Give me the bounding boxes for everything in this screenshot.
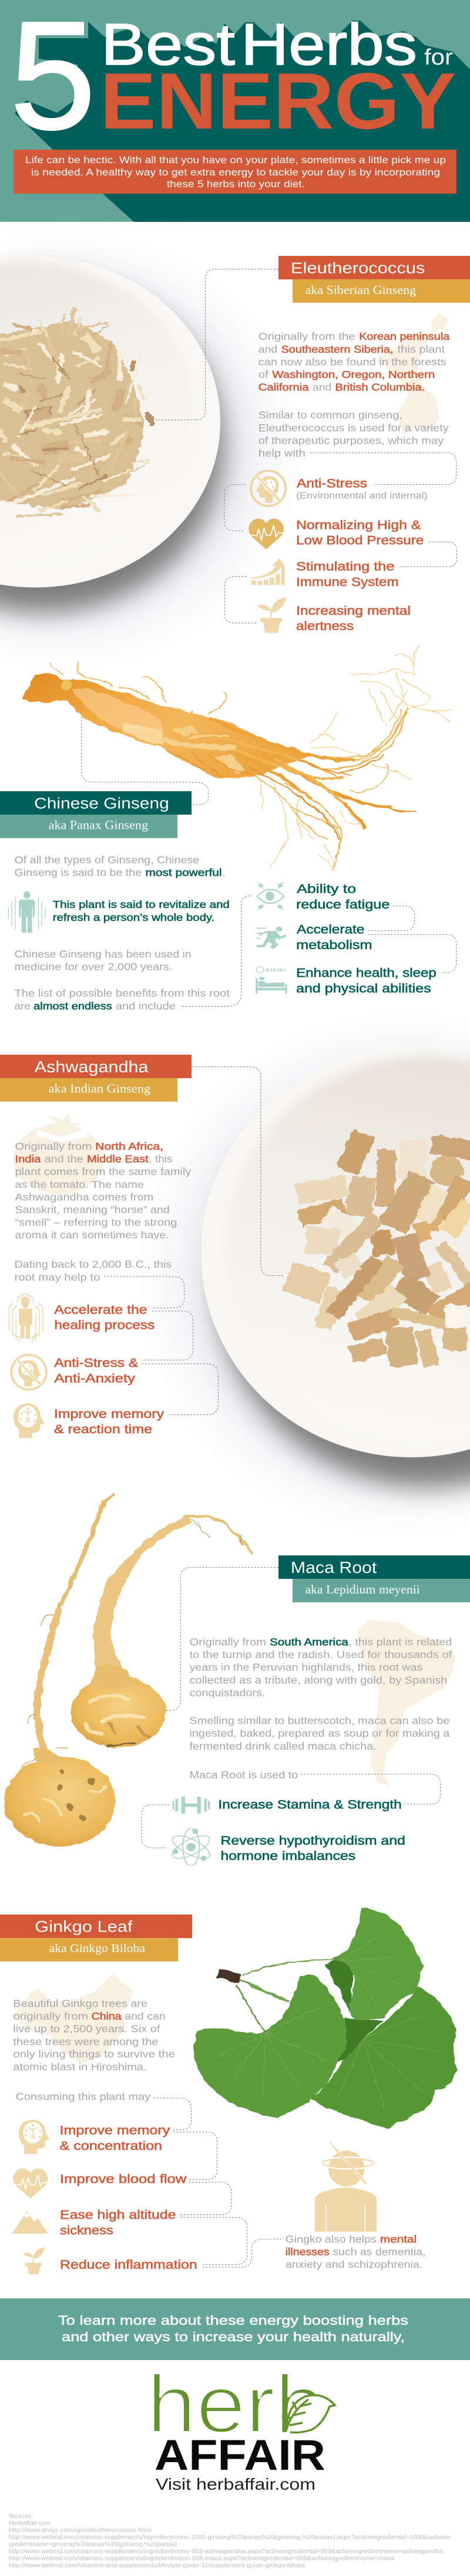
intro box: is needed. A healthy way to get extra energy to tackle your day is by incorporating [31, 167, 440, 178]
origin text: North Africa, [95, 1140, 163, 1152]
callout line to roots [192, 1067, 283, 1276]
benefit: immune system: Stimulating the [296, 559, 394, 573]
benefit: health and sleep: Enhance health, sleep [296, 965, 437, 980]
origin text: Southeastern Siberia, [281, 344, 393, 355]
usage text: root may help to [14, 1271, 100, 1283]
root chunks [288, 1134, 470, 1365]
usage text [258, 410, 449, 460]
origin text: aroma it can sometimes have. [15, 1229, 169, 1241]
name banner: aka Lepidium meyenii [305, 1583, 420, 1596]
origin text [15, 1140, 192, 1241]
origin text: these trees were among the [13, 2035, 158, 2047]
benefit: stamina: Increase Stamina & Strength [218, 1797, 402, 1811]
origin text: China [92, 2010, 122, 2022]
history text [14, 949, 192, 973]
ginseng root photo [22, 646, 452, 871]
connector lines [154, 2098, 283, 2267]
panel: Chinese Ginseng [0, 646, 456, 1012]
benefit: altitude: Ease high altitude [60, 2208, 176, 2221]
benefit: hormones [221, 1834, 405, 1863]
intro text [14, 855, 226, 879]
icon: anti-stress [251, 471, 286, 506]
icon: healing aura [9, 1294, 43, 1342]
callout: revitalize [53, 899, 230, 923]
benefit: fatigue: reduce fatigue [296, 897, 390, 911]
icon: atom [169, 1828, 213, 1866]
connector lines [182, 896, 456, 1007]
mental illness text: anxiety and schizophrenia. [286, 2258, 422, 2270]
sources: http://www.webmd.com/vitamins-supplements/ingredientmono-953-ashwagandha.aspx?activeingredientid=953&activeingredientname=ashwagandha [9, 2548, 443, 2555]
map of Korea [377, 313, 448, 435]
mental illness text: illnesses [286, 2246, 330, 2257]
callout line to herb [153, 269, 278, 420]
benefit: memory: & reaction time [54, 1422, 152, 1436]
benefit: anti-stress: Anti-Anxiety [54, 1371, 136, 1385]
intro box [14, 150, 456, 194]
benefit: healing: Accelerate the [54, 1302, 147, 1316]
benefit: blood pressure: Normalizing High & [296, 518, 421, 532]
benefit: anti-stress [296, 476, 428, 501]
mental illness text: such as dementia, [333, 2246, 425, 2257]
usage text: Consuming this plant may [16, 2091, 151, 2102]
benefit: immune system: Immune System [296, 575, 399, 589]
benefits intro text [14, 988, 230, 1012]
benefit: hormones: hormone imbalances [221, 1849, 355, 1863]
name banner [0, 791, 192, 838]
benefit: anti-stress: Anti-Stress [297, 476, 367, 490]
benefit: mental alertness: alertness [296, 619, 354, 633]
panel: Ashwagandha [0, 1049, 470, 1491]
benefit: anti-stress: (Environmental and internal) [296, 491, 428, 501]
icon: vibrating person [8, 892, 45, 933]
benefit: anti-stress [54, 1356, 138, 1385]
benefit: metabolism [296, 922, 372, 952]
tomato illustration [14, 1113, 103, 1194]
name banner [278, 1555, 470, 1602]
icon: leaf [282, 2375, 335, 2432]
benefits intro text: are [14, 1001, 31, 1012]
icon: eye [256, 881, 285, 911]
origin text: atomic blast in Hiroshima. [13, 2061, 146, 2072]
plate shadow [0, 273, 258, 625]
benefit: health and sleep [296, 965, 437, 995]
icon: bed with clock: 8-10 Hrs [266, 967, 286, 973]
benefits intro text: almost endless [33, 1001, 112, 1012]
plate [201, 1049, 470, 1457]
origin text: and [313, 382, 331, 393]
history text: Chinese Ginseng has been used in [14, 949, 192, 960]
icon: runner [256, 927, 286, 949]
preparation text: ingested, baked, prepared as soup or for making a [189, 1727, 450, 1739]
connector lines [142, 1774, 440, 1848]
icon: plant [22, 2247, 45, 2274]
name banner: Ginkgo Leaf [35, 1918, 133, 1936]
panel: Ginkgo Leaf [0, 1908, 457, 2274]
icon: heart [247, 518, 285, 549]
origin text: “smell” – referring to the strong [15, 1216, 177, 1228]
icon: mental health figure [315, 2142, 377, 2232]
icon: bed with clock [256, 967, 287, 994]
benefit: altitude: sickness [60, 2223, 113, 2237]
panel: Maca Root [5, 1495, 470, 1866]
long shadow [15, 21, 470, 222]
origin text: and [258, 344, 277, 355]
icon: plant [257, 597, 286, 633]
logo word: herb: herb [147, 2359, 324, 2450]
benefit: immune system [296, 559, 399, 589]
sources: http://www.webmd.com/vitamins-and-supplements/lifestyle-guide-11/supplement-guide-ginkgo-biloba [9, 2563, 305, 2569]
sources: http://www.webmd.com/vitamins-supplements/ingredientmono-1000-ginseng%20panax%20(ginseng,%20panax).aspx?activeingredientid=1000&activein [9, 2534, 451, 2541]
origin text: as the tomato. The name [15, 1179, 144, 1190]
header background [0, 0, 470, 222]
panel: call to action [0, 2298, 470, 2360]
website: Visit herbaffair.com [156, 2475, 315, 2493]
benefit: mental alertness [296, 603, 411, 633]
title: ENERGY [100, 56, 456, 146]
origin text: Originally from [189, 1636, 266, 1647]
origin text: this plant [398, 344, 445, 355]
origin text: and the [45, 1153, 83, 1164]
title [10, 0, 456, 161]
origin text: Originally from [15, 1140, 92, 1152]
benefit: memory: Improve memory [54, 1407, 164, 1421]
usage text: help with [258, 448, 306, 460]
name banner [278, 256, 470, 303]
origin text: Beautiful Ginkgo trees are [13, 1998, 147, 2009]
origin text: collected as a tribute, along with gold, by Spanish [189, 1674, 447, 1686]
origin text: Ashwagandha comes from [15, 1191, 153, 1203]
usage text: Eleutherococcus is used for a variety [258, 423, 449, 434]
origin text: Washington, Oregon, Northern [272, 369, 435, 380]
name banner: aka Indian Ginseng [49, 1082, 150, 1095]
intro box: these 5 herbs into your diet. [167, 178, 305, 190]
origin text: only living things to survive the [13, 2048, 175, 2060]
intro text: most powerful [145, 867, 222, 879]
origin text: and can [125, 2010, 166, 2022]
name banner: aka Siberian Ginseng [305, 283, 416, 297]
benefit: altitude [60, 2208, 176, 2237]
sources: Herbaffair.com [9, 2520, 51, 2527]
benefit: health and sleep: and physical abilities [296, 981, 431, 995]
logo word: AFFAIR: AFFAIR [155, 2432, 325, 2479]
benefits intro text: and include [116, 1001, 176, 1012]
origin text: conquistadors. [189, 1687, 266, 1699]
intro text: Ginseng is said to be the [14, 867, 142, 879]
map of China [12, 1974, 133, 2063]
benefit: metabolism: metabolism [296, 938, 372, 952]
benefit: memory [60, 2123, 170, 2152]
origin text: years in the Peruvian highlands, this root was [189, 1662, 422, 1673]
origin text [13, 1998, 175, 2072]
usage text: Maca Root is used to [189, 1769, 298, 1781]
benefit: blood pressure [296, 518, 424, 547]
origin text: Originally from the [258, 332, 355, 343]
callout: revitalize: This plant is said to revitalize and [53, 899, 230, 911]
benefit: inflammation: Reduce inflammation [60, 2258, 197, 2271]
origin text: India [15, 1153, 41, 1164]
icon: dumbbell [172, 1797, 210, 1814]
usage text: Dating back to 2,000 B.C., this [14, 1258, 172, 1270]
origin text: British Columbia. [335, 382, 425, 393]
origin text: Korean peninsula [359, 332, 450, 343]
origin text: Middle East [87, 1153, 149, 1164]
sources: gredientname=ginseng%20panax%20(ginseng,%20panax) [9, 2541, 177, 2548]
usage text [14, 1258, 172, 1283]
call to action text: To learn more about these energy boosting herbs [58, 2313, 408, 2328]
origin text: live up to 2,500 years. Six of [13, 2023, 160, 2034]
sources: http://www.drugs.com/npc/eleutherococcus.html [9, 2527, 151, 2534]
callout: revitalize: refresh a person’s whole body. [53, 912, 214, 923]
name banner: aka Ginkgo Biloba [49, 1941, 145, 1954]
intro text: Of all the types of Ginseng, Chinese [14, 855, 199, 866]
origin text: South America [270, 1636, 349, 1647]
origin text: , this [149, 1153, 172, 1164]
connector lines [104, 1277, 218, 1414]
callout line to root [165, 1567, 278, 1710]
benefit: blood pressure: Low Blood Pressure [296, 533, 424, 547]
usage text: Similar to common ginseng, [258, 410, 402, 421]
origin text [189, 1636, 452, 1699]
benefit: memory [54, 1407, 164, 1436]
intro text: . [222, 867, 226, 879]
benefit: memory: Improve memory [60, 2123, 170, 2137]
mental illness text: mental [380, 2233, 417, 2245]
benefits intro text: The list of possible benefits from this root [14, 988, 230, 1000]
benefit: fatigue: Ability to [297, 882, 356, 896]
band [0, 2298, 470, 2360]
name banner: Chinese Ginseng [34, 795, 169, 812]
name banner: Maca Root [291, 1559, 377, 1577]
icon: mountain [12, 2211, 48, 2234]
icon: memory head [14, 1403, 45, 1438]
history text: medicine for over 2,000 years. [14, 961, 172, 973]
origin text: , this plant is related [348, 1636, 452, 1647]
origin text: originally from [13, 2010, 88, 2022]
call to action text [58, 2313, 408, 2344]
origin text: to the turnip and the radish. Used for thousands of [189, 1649, 452, 1660]
name banner [0, 1055, 192, 1102]
title: for [424, 45, 453, 70]
benefit: anti-stress: Anti-Stress & [54, 1356, 138, 1370]
name banner [0, 1915, 192, 1961]
call to action text: and other ways to increase your health naturally, [62, 2329, 405, 2344]
title: Herbs [241, 12, 417, 77]
sources [9, 2513, 451, 2569]
origin text: California [258, 382, 309, 393]
intro box: Life can be hectic. With all that you have on your plate, sometimes a little pick me up [25, 154, 446, 166]
ginkgo leaves photo [194, 1908, 457, 2129]
benefit: blood flow: Improve blood flow [60, 2172, 187, 2186]
maca root photo [5, 1495, 252, 1847]
preparation text [189, 1715, 450, 1752]
name banner: aka Panax Ginseng [49, 818, 148, 832]
panel: header [0, 0, 470, 222]
benefit: healing [54, 1302, 155, 1332]
origin text: plant comes from the same family [15, 1166, 192, 1177]
origin text: Sanskrit, meaning “horse” and [15, 1204, 170, 1216]
map of South America [357, 1619, 456, 1785]
icon: rising chart [251, 558, 285, 585]
benefit: mental alertness: Increasing mental [296, 603, 411, 617]
origin text: can now also be found in the forests [258, 357, 446, 368]
connector lines [224, 453, 457, 623]
logo: Herb Affair [147, 2359, 335, 2493]
shredded root pile [0, 308, 153, 516]
sources: http://www.webmd.com/vitamins-supplements/ingredientmono-555-maca.aspx?activeingredientid=555&activeingredientname=maca [9, 2555, 394, 2562]
mental illness text: Gingko also helps [286, 2233, 377, 2245]
panel: Eleutherococcus [0, 256, 470, 633]
icon: anti-stress [11, 1355, 46, 1390]
mental illness text [286, 2233, 425, 2270]
icon: memory head [19, 2119, 49, 2154]
preparation text: fermented drink called maca chicha. [189, 1740, 377, 1752]
name banner: Eleutherococcus [291, 260, 425, 277]
title: Best [101, 12, 235, 77]
benefit: memory: & concentration [60, 2139, 162, 2152]
origin text: of [258, 369, 268, 380]
plate [0, 256, 220, 588]
icon: heart [12, 2169, 49, 2199]
benefit: metabolism: Accelerate [297, 922, 364, 936]
preparation text: Smelling similar to butterscotch, maca can also be [189, 1715, 449, 1726]
usage text: of therapeutic purposes, which may [258, 435, 444, 447]
benefit: fatigue [296, 882, 390, 911]
origin text [258, 332, 450, 393]
plate shadow [182, 1056, 470, 1491]
callout line to root [82, 717, 209, 805]
sources: Sources: [9, 2513, 33, 2520]
benefit: healing: healing process [54, 1318, 155, 1332]
benefit: hormones: Reverse hypothyroidism and [221, 1834, 405, 1848]
name banner: Ashwagandha [35, 1058, 149, 1076]
